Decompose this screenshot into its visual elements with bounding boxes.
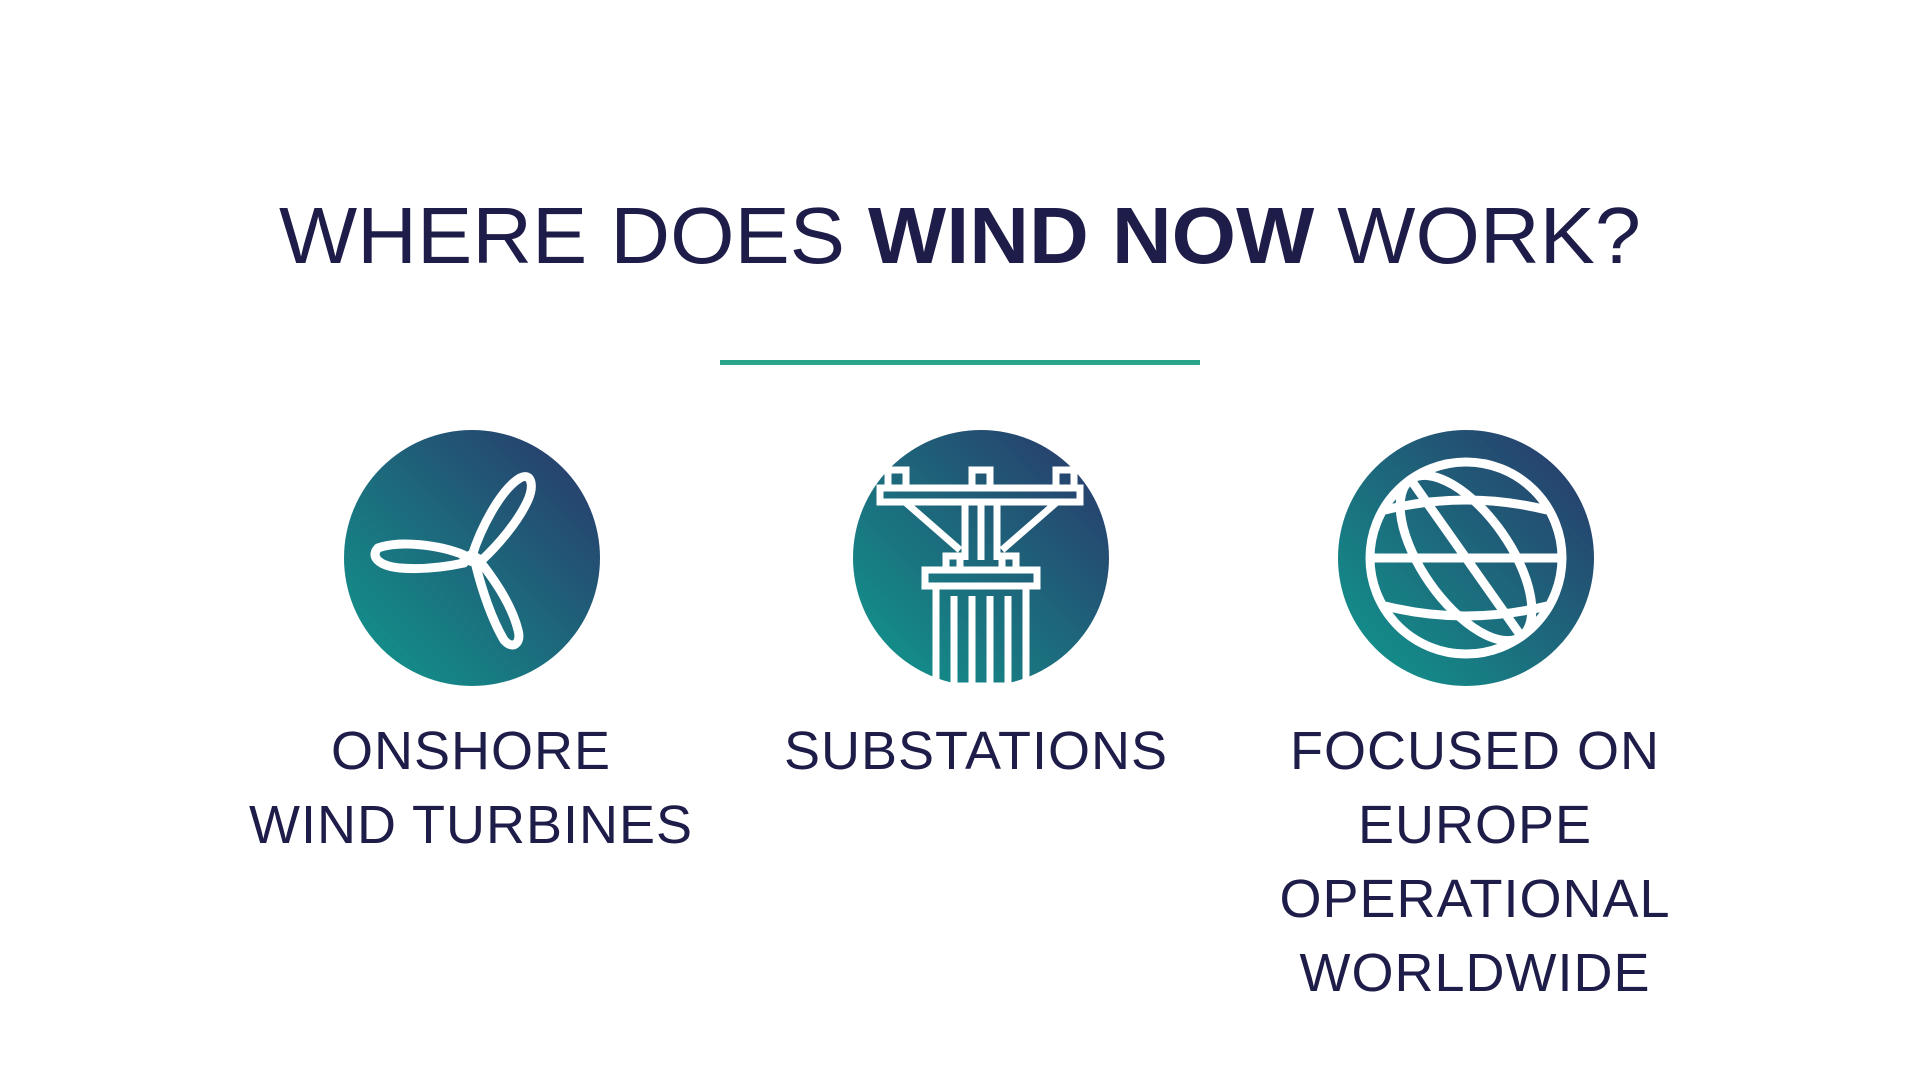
label: substations: SUBSTATIONS [784,721,1168,781]
label: europe worldwide: EUROPE [1358,795,1592,855]
label: europe worldwide [1279,721,1671,1003]
icon: wind turbine [344,430,600,686]
label: onshore wind turbines: ONSHORE [331,721,611,781]
icon: globe [1338,430,1594,686]
text: WIND TURBINES [249,795,693,855]
label: europe worldwide: FOCUSED ON [1290,721,1660,781]
title: WHERE DOES WIND NOW WORK? [279,191,1641,280]
label: europe worldwide: WORLDWIDE [1300,943,1650,1003]
label: europe worldwide: OPERATIONAL [1279,869,1671,929]
icon: substation [853,430,1109,686]
divider line [720,360,1200,365]
